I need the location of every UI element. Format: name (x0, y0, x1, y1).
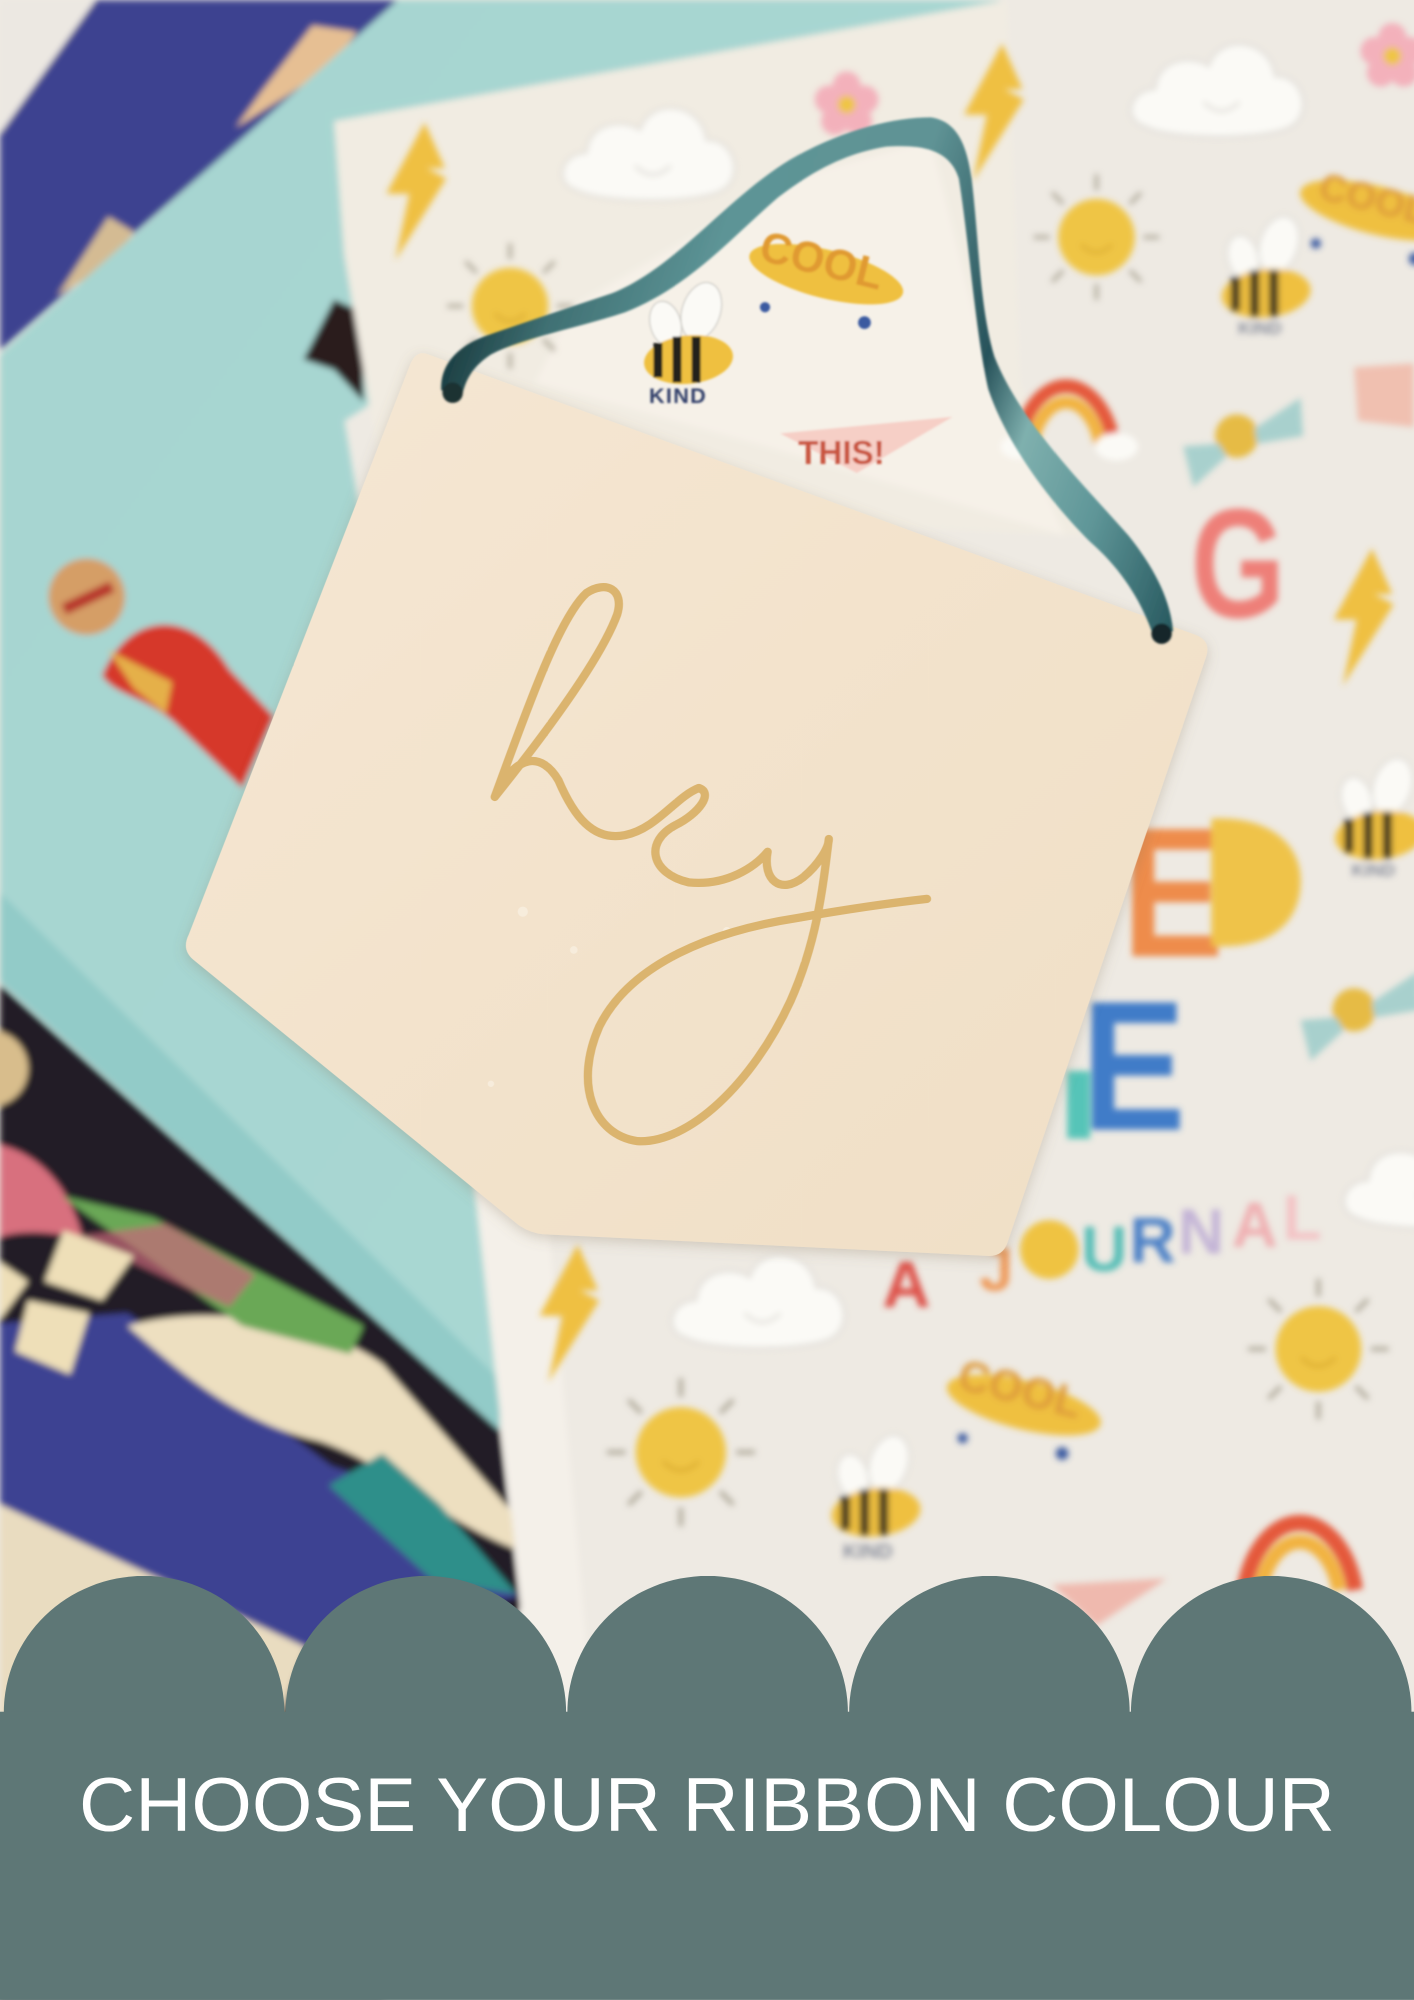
small dark figure (303, 300, 363, 402)
engraved word hey (495, 587, 927, 1141)
journal cover illustrations (386, 23, 1414, 1626)
man figure on cover (48, 558, 274, 788)
band (0, 1712, 1414, 2000)
pennants (1052, 363, 1414, 1626)
journal title letters: U (1081, 1213, 1127, 1285)
journal title letters: N (1178, 1195, 1224, 1267)
rainbows (1000, 386, 1355, 1590)
jacket (102, 625, 274, 788)
journal title letters: R (1130, 1204, 1176, 1276)
checker pattern (0, 1230, 134, 1374)
journal title letters: E (1122, 790, 1224, 996)
purple lower book (0, 1313, 518, 1647)
cream swoosh (128, 1316, 516, 1549)
bees: KIND (843, 1541, 893, 1563)
lightning bolts (386, 43, 1394, 1382)
ribbon band (441, 117, 1173, 638)
pink stripe band (77, 1224, 255, 1307)
scallops (4, 1576, 1411, 1712)
head (48, 558, 125, 635)
heading: CHOOSE YOUR RIBBON COLOUR (79, 1763, 1335, 1848)
suns (449, 176, 1387, 1524)
pennant: this: THIS! (798, 435, 885, 472)
clouds (563, 44, 1414, 1348)
navy book flowers (236, 26, 357, 128)
skateboards: COOL (953, 1351, 1086, 1428)
white page under ribbon (536, 140, 1065, 536)
journal title letters (882, 476, 1322, 1322)
bee: kind: KIND (649, 383, 707, 408)
scalloped footer band (0, 1576, 1414, 2000)
navy book flower small (57, 217, 134, 296)
bees: KIND (1352, 860, 1395, 880)
sweets (1183, 398, 1414, 1061)
bees: KIND (1238, 318, 1282, 338)
journal title letters: L (1283, 1181, 1322, 1253)
journal title letters: G (1191, 476, 1285, 650)
ribbon knot left (442, 383, 463, 403)
lower journal edge (474, 1186, 599, 1785)
tan disc (0, 1030, 28, 1107)
green stripe band (61, 1196, 363, 1354)
wooden sign (186, 353, 1207, 1256)
upper journal (334, 0, 1084, 536)
blurred book covers (0, 0, 1084, 1999)
bee: kind (642, 277, 735, 408)
flowers (815, 23, 1414, 135)
chalky marks (488, 907, 731, 1087)
journal title letters: E (1081, 964, 1186, 1170)
cream lower strip (0, 1505, 306, 1785)
white corner (0, 0, 96, 134)
dark book (0, 984, 520, 1999)
pennant: this (780, 417, 952, 473)
skateboard: cool (744, 223, 909, 329)
journal title letters: A (882, 1248, 930, 1322)
teal book spine edge (0, 893, 500, 1431)
pink band (0, 1145, 83, 1239)
green mountain (329, 1454, 516, 1594)
journal title letters: J (979, 1235, 1013, 1303)
ribbon (441, 117, 1173, 644)
skateboards (941, 165, 1414, 1460)
teal book cover (0, 0, 1001, 1396)
journal title letters: A (1232, 1189, 1278, 1261)
ribbon knot right (1151, 623, 1172, 644)
bees (829, 211, 1414, 1563)
scarf (108, 650, 172, 714)
skateboard: cool: COOL (755, 223, 888, 300)
navy book (0, 0, 402, 351)
sign board (186, 353, 1207, 1256)
glasses (64, 587, 112, 609)
sharp stickers near ribbon (642, 223, 952, 473)
